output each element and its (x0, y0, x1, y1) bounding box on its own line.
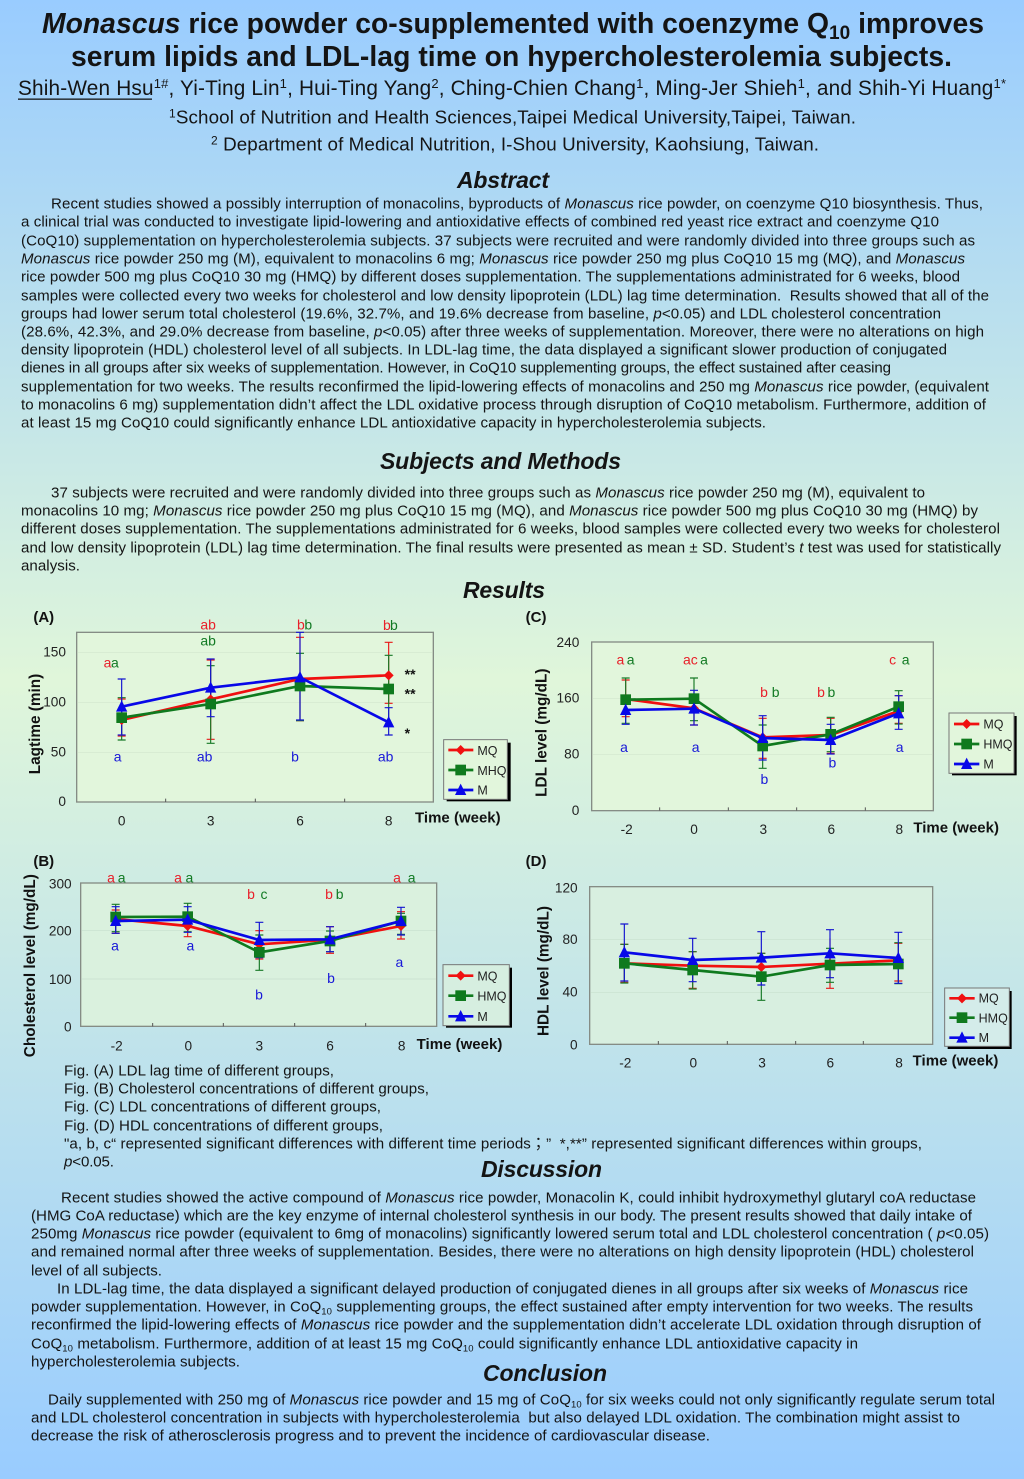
error bars D (620, 924, 902, 1000)
significance letters C: a (700, 652, 708, 668)
series M B (110, 913, 407, 945)
legend B: HMQ (477, 990, 507, 1004)
text: conclusion: and LDL cholesterol concentration in subjects with hypercholesterolemia but also delayed LDL oxidation. The combination might assist to (31, 1410, 960, 1427)
significance letters C: a (616, 652, 624, 668)
axis labels D (535, 880, 998, 1071)
figure captions: "a, b, c“ represented significant differences with different time periods；” *,**” represented significant differences within groups, (64, 1136, 922, 1153)
axis labels A: 50 (51, 745, 66, 760)
plot area D (590, 887, 933, 1044)
axis labels D: 3 (758, 1056, 766, 1071)
title: 10 (829, 23, 850, 44)
figure captions: Fig. (D) HDL concentrations of different groups, (64, 1118, 383, 1135)
panel letter B: (B) (33, 853, 54, 870)
text: conclusion: Daily supplemented with 250 mg of Monascus rice powder and 15 mg of CoQ (48, 1392, 571, 1409)
text: abstract: at least 15 mg CoQ10 could significantly enhance LDL antioxidative capacity in hypercholesterolemia subjects. (21, 415, 766, 432)
figure captions (63, 1063, 922, 1171)
series MHQ A (116, 681, 394, 723)
axis labels A: 3 (207, 814, 214, 829)
axis labels A: 6 (296, 814, 304, 829)
text: discussion: 10 (62, 1344, 73, 1355)
title: improves (850, 7, 984, 39)
legend C (949, 713, 1017, 775)
significance letters A: ** (405, 666, 416, 682)
axis labels C: Time (week) (913, 820, 999, 837)
legend B (443, 965, 512, 1028)
significance letters C: a (627, 652, 635, 668)
text: abstract: density lipoprotein (HDL) cholesterol level of all subjects. In LDL-lag time, the data displayed a significant slower production of conjugated (21, 342, 947, 359)
axis labels B: -2 (111, 1038, 123, 1053)
axis labels D: 0 (690, 1056, 698, 1071)
authors: , Ming-Jer Shieh (644, 77, 797, 100)
title: serum lipids and LDL-lag time on hypercholesterolemia subjects. (71, 40, 952, 72)
text: abstract: rice powder 500 mg plus CoQ10 30 mg (HMQ) by different doses supplementation. The supplementations administrated for 6 weeks, blood (21, 269, 960, 286)
significance letters A: a (111, 654, 119, 670)
significance letters C: b (817, 684, 825, 700)
axis labels D: 8 (895, 1056, 903, 1071)
significance letters B: a (186, 937, 194, 953)
affiliation 2: Department of Medical Nutrition, I-Shou University, Kaohsiung, Taiwan. (218, 134, 819, 154)
significance letters A: * (405, 725, 411, 741)
axis labels B: Cholesterol level (mg/dL) (22, 874, 39, 1057)
text: abstract: (28.6%, 42.3%, and 29.0% decrease from baseline, p<0.05) after three weeks of supplementation. Moreover, there were no alterations on high (21, 324, 984, 341)
text: discussion: CoQ (31, 1336, 62, 1353)
text: abstract: a clinical trial was conducted to investigate lipid-lowering and antioxidative effects of combined red yeast rice extract and coenzyme Q10 (21, 214, 939, 231)
authors: 2 (431, 76, 439, 91)
text: subjects and methods: monacolins 10 mg; Monascus rice powder 250 mg plus CoQ10 15 mg (MQ), and Monascus rice powder 500 mg plus CoQ10 30 mg (HMQ) by (21, 503, 978, 520)
figure captions: Fig. (B) Cholesterol concentrations of different groups, (64, 1081, 429, 1098)
axis labels A: 150 (43, 645, 66, 660)
text: conclusion: 10 (571, 1400, 582, 1411)
panel letter A: (A) (33, 609, 54, 626)
figure captions: Fig. (C) LDL concentrations of different groups, (64, 1099, 381, 1116)
series MQ C (621, 694, 904, 742)
axis labels C: 3 (760, 822, 767, 837)
chart B: cholesterol level (22, 853, 512, 1057)
axis labels C: 6 (828, 822, 835, 837)
plot area B (81, 883, 437, 1026)
axis labels B: 200 (49, 924, 72, 939)
axis labels A: 100 (43, 695, 66, 710)
series M C (620, 702, 904, 745)
text: abstract (21, 196, 990, 432)
axis labels D: 120 (555, 880, 578, 895)
significance letters C: c (889, 652, 896, 668)
significance letters C: a (620, 739, 628, 755)
significance letters A: ** (405, 685, 416, 701)
significance letters B: b (325, 886, 333, 902)
error bars A (118, 632, 393, 743)
authors: 1 (280, 76, 287, 91)
axis labels D: HDL level (mg/dL) (535, 906, 552, 1036)
text: discussion: 10 (321, 1307, 332, 1318)
authors: , Hui-Ting Yang (287, 77, 431, 100)
significance letters A: b (297, 616, 305, 632)
authors: 1* (994, 76, 1006, 91)
text: abstract: groups had lower serum total cholesterol (19.6%, 32.7%, and 19.6% decrease from baseline, p<0.05) and LDL cholesterol concentration (21, 306, 941, 323)
affiliation 1: 1 (169, 106, 176, 120)
significance letters C: b (828, 755, 836, 771)
axis labels D: 6 (827, 1056, 834, 1071)
significance letters A: b (383, 617, 391, 633)
significance letters A: a (114, 748, 122, 764)
significance letters B: a (408, 870, 416, 886)
authors: 1 (636, 76, 643, 91)
significance letters B: a (185, 870, 193, 886)
text: discussion: hypercholesterolemia subjects. (31, 1354, 240, 1371)
significance letters C: a (896, 739, 904, 755)
heading: abstract: Abstract (456, 167, 550, 193)
significance letters B: a (118, 870, 126, 886)
text: subjects and methods: and low density lipoprotein (LDL) lag time determination. The final results were presented as mean ± SD. Student’s t test was used for statistically (21, 540, 1001, 557)
significance letters B: a (107, 870, 115, 886)
legend D: M (979, 1031, 989, 1045)
chart A: lag time (27, 609, 511, 829)
text: discussion: In LDL-lag time, the data displayed a significant delayed production of conjugated dienes in all groups after six weeks of Monascus rice (57, 1281, 968, 1298)
series MQ B (111, 914, 406, 949)
text: conclusion (31, 1392, 995, 1445)
axis labels D: Time (week) (913, 1053, 998, 1070)
significance letters A: a (104, 654, 112, 670)
chart C: LDL level (526, 609, 1017, 837)
authors: , Ching-Chien Chang (439, 77, 636, 100)
text: conclusion: decrease the risk of atherosclerosis progress and to prevent the incidence of cardiovascular disease. (31, 1428, 710, 1445)
significance letters B: b (247, 886, 255, 902)
text: discussion: 250mg Monascus rice powder (equivalent to 6mg of monacolins) significantly lowered serum total and LDL cholesterol concentration ( p<0.05) (31, 1226, 989, 1243)
axis labels B: 0 (64, 1020, 72, 1035)
authors: , and Shih-Yi Huang (805, 77, 993, 100)
significance letters C (616, 652, 910, 787)
significance letters B: c (260, 886, 267, 902)
text: discussion: (HMG CoA reductase) which are the key enzyme of internal cholesterol synthesis in our body. The present results showed that daily intake of (31, 1208, 973, 1225)
text: subjects and methods: analysis. (21, 558, 80, 575)
axis labels A: 0 (118, 814, 126, 829)
plot area A (77, 632, 433, 802)
axis labels B: 100 (49, 972, 72, 987)
heading: results: Results (463, 577, 545, 603)
axis labels C: 0 (572, 803, 580, 818)
series M A (116, 671, 394, 727)
significance letters A: ab (197, 748, 213, 764)
text: abstract: Monascus rice powder 250 mg (M), equivalent to monacolins 6 mg; Monascus rice powder 250 mg plus CoQ10 15 mg (MQ), and Monascus (21, 251, 965, 268)
significance letters B (107, 870, 416, 1003)
affiliation 2: 2 (211, 134, 218, 148)
legend B: M (477, 1010, 488, 1024)
error bars C (622, 678, 903, 768)
figure captions: Fig. (A) LDL lag time of different groups, (64, 1063, 334, 1080)
legend D (945, 988, 1012, 1049)
significance letters C: a (692, 739, 700, 755)
heading: subjects and methods: Subjects and Methods (380, 448, 621, 474)
significance letters C: b (760, 684, 768, 700)
series M D (619, 946, 904, 965)
legend D: HMQ (979, 1011, 1008, 1025)
title (42, 7, 984, 72)
legend B: MQ (477, 969, 498, 983)
axis labels B (22, 874, 502, 1057)
significance letters B: b (336, 886, 344, 902)
figure captions: p<0.05. (63, 1154, 114, 1171)
significance letters B: a (393, 870, 401, 886)
significance letters A: ab (200, 616, 216, 632)
text: subjects and methods: different doses supplementation. The supplementations administrated for 6 weeks, blood samples were collected every two weeks for cholesterol (21, 521, 1000, 538)
authors (18, 76, 1006, 100)
axis labels C: 240 (557, 635, 580, 650)
axis labels A: Lagtime (min) (27, 674, 44, 774)
text: abstract: (CoQ10) supplementation on hypercholesterolemia subjects. 37 subjects were recruited and were randomly divided into three groups such as (21, 233, 975, 250)
axis labels D: 0 (570, 1038, 578, 1053)
significance letters C: a (902, 652, 910, 668)
significance letters B: a (174, 870, 182, 886)
significance letters C: ac (683, 652, 698, 668)
significance letters A: ab (200, 632, 216, 648)
panel letter C: (C) (526, 609, 546, 626)
series HMQ B (110, 911, 406, 958)
affiliation 1: School of Nutrition and Health Sciences,Taipei Medical University,Taipei, Taiwan. (176, 106, 856, 128)
error bars B (112, 903, 405, 970)
text: discussion (31, 1190, 989, 1371)
text: abstract: dienes in all groups after six weeks of supplementation. However, in CoQ10 supplementing groups, the effect sustained after ceasing (21, 360, 891, 377)
text: abstract: to monacolins 6 mg) supplementation didn’t affect the LDL oxidative process through disruption of CoQ10 metabolism. Furthermore, addition of (21, 397, 987, 414)
significance letters A: b (291, 748, 299, 764)
significance letters B: b (255, 987, 263, 1003)
axis labels A: 8 (385, 814, 392, 829)
text: subjects and methods: 37 subjects were recruited and were randomly divided into three groups such as Monascus rice powder 250 mg (M), equivalent to (51, 485, 925, 502)
authors: 1 (798, 76, 805, 91)
text: discussion: supplementing groups, the effect sustained after empty intervention for two weeks. The results (332, 1299, 973, 1316)
text: discussion: could significantly enhance LDL antioxidative capacity in (474, 1336, 858, 1353)
series MQ D (619, 955, 903, 972)
text: discussion: level of all subjects. (31, 1263, 162, 1280)
significance letters A: b (304, 616, 312, 632)
axis labels A: Time (week) (415, 810, 501, 827)
legend C: M (983, 758, 994, 772)
axis labels D: -2 (619, 1056, 631, 1071)
axis labels B: 6 (326, 1038, 334, 1053)
authors: , Yi-Ting Lin (168, 77, 280, 100)
text: conclusion: for six weeks could not only significantly regulate serum total (582, 1392, 995, 1409)
axis labels C: 8 (896, 822, 903, 837)
authors: 1# (154, 76, 169, 91)
axis labels C (534, 635, 999, 837)
text: discussion: 10 (463, 1344, 474, 1355)
text: discussion: and remained normal after three weeks of supplementation. Besides, there were no alterations on high density lipoprotein (HDL) cholesterol (31, 1244, 974, 1261)
axis labels C: 0 (690, 822, 698, 837)
series HMQ D (619, 958, 904, 982)
legend A: MQ (477, 744, 498, 758)
axis labels A (27, 645, 501, 829)
significance letters A (104, 616, 416, 764)
text: subjects and methods (21, 485, 1001, 575)
axis labels D: 80 (562, 932, 578, 947)
text: abstract: samples were collected every two weeks for cholesterol and low density lipoprotein (LDL) lag time determination. Results showed that all of the (21, 288, 989, 305)
significance letters C: b (827, 684, 835, 700)
significance letters B: b (327, 970, 335, 986)
text: discussion: powder supplementation. However, in CoQ (31, 1299, 321, 1316)
text: abstract: Recent studies showed a possibly interruption of monacolins, byproducts of Monascus rice powder, on coenzyme Q10 biosynthesis. Thus, (51, 196, 983, 213)
text: abstract: supplementation for two weeks. The results reconfirmed the lipid-lowering effects of monacolins and 250 mg Monascus rice powder, (equivalent (21, 379, 990, 396)
significance letters C: b (772, 684, 780, 700)
text: discussion: Recent studies showed the active compound of Monascus rice powder, Monacolin K, could inhibit hydroxymethyl glutaryl coA reductase (61, 1190, 976, 1207)
axis labels C: LDL level (mg/dL) (534, 669, 551, 797)
legend A: M (477, 783, 488, 797)
significance letters A: b (390, 617, 398, 633)
text: discussion: metabolism. Furthermore, addition of at least 15 mg CoQ (73, 1336, 463, 1353)
axis labels C: -2 (621, 822, 633, 837)
axis labels B: 0 (185, 1038, 193, 1053)
series MQ A (117, 670, 394, 725)
axis labels B: 3 (256, 1038, 263, 1053)
plot area C (592, 642, 933, 811)
legend C: MQ (983, 717, 1004, 731)
legend A (444, 740, 511, 801)
title: Monascus rice powder co-supplemented with coenzyme Q (42, 7, 829, 39)
significance letters B: a (395, 954, 403, 970)
heading: discussion: Discussion (481, 1156, 602, 1182)
series HMQ C (620, 693, 904, 751)
significance letters A: ab (378, 748, 394, 764)
significance letters C: b (760, 771, 768, 787)
authors: Shih-Wen Hsu (18, 77, 154, 100)
legend D: MQ (979, 992, 999, 1006)
axis labels B: Time (week) (417, 1036, 502, 1053)
legend A: MHQ (477, 764, 507, 778)
panel letter D: (D) (526, 853, 546, 870)
axis labels C: 160 (557, 690, 580, 705)
axis labels A: 0 (58, 794, 66, 809)
legend C: HMQ (983, 738, 1013, 752)
chart D: HDL level (526, 853, 1012, 1071)
axis labels C: 80 (564, 746, 580, 761)
significance letters B: a (111, 937, 119, 953)
axis labels B: 300 (49, 876, 72, 891)
axis labels B: 8 (398, 1038, 405, 1053)
text: discussion: reconfirmed the lipid-lowering effects of Monascus rice powder and the supplementation didn’t accelerate LDL oxidation through disruption of (31, 1317, 982, 1334)
heading: conclusion: Conclusion (483, 1360, 607, 1386)
axis labels D: 40 (562, 985, 578, 1000)
